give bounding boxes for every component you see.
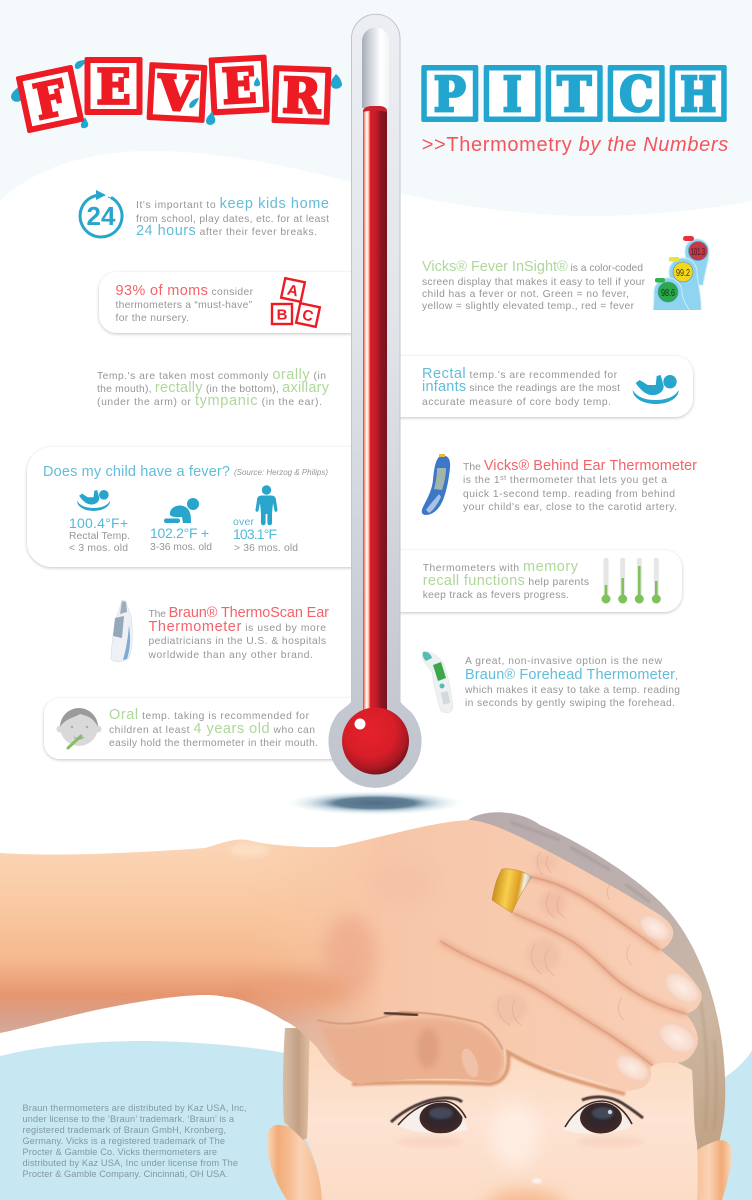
block P xyxy=(421,65,478,123)
left eye xyxy=(391,1098,468,1134)
fact: Vicks Behind Ear Thermometer: thermometer that lets you get a xyxy=(507,475,667,486)
fact: Braun ThermoScan: worldwide than any other brand. xyxy=(148,650,313,661)
icon: ABC blocks xyxy=(272,278,320,327)
fact: Braun ThermoScan: The Braun® ThermoScan Ear xyxy=(148,605,329,621)
icon: Braun ear thermometer xyxy=(111,600,132,662)
panel: memory recall xyxy=(392,550,682,612)
fact: Vicks Behind Ear Thermometer: The Vicks® Behind Ear Thermometer xyxy=(463,458,697,474)
block R: R xyxy=(281,68,322,125)
photo: child's head with hand on forehead xyxy=(0,800,752,1200)
thermometer floor shadow xyxy=(287,791,463,815)
block E xyxy=(84,57,142,116)
child's left ear xyxy=(267,1125,322,1200)
footer legal text: Procter & Gamble Company. Cincinnati, OH USA. xyxy=(22,1169,228,1179)
hair streaks xyxy=(510,822,716,1130)
arm and hand xyxy=(0,820,702,1090)
fact: Vicks Behind Ear Thermometer: quick 1-second temp. reading from behind xyxy=(463,489,675,500)
column: 3 to 36 months xyxy=(150,498,212,553)
footer legal text: Procter & Gamble Co. Vicks thermometers are xyxy=(22,1147,217,1157)
column: under 3 months: 100.4°F+ xyxy=(69,515,128,531)
panel: rectal temperature: accurate measure of core body temp. xyxy=(422,397,611,408)
icon: ABC blocks: C xyxy=(301,307,315,325)
panel: oral temperature: children at least 4 years old who can xyxy=(109,721,315,737)
panel: rectal temperature: infants since the readings are the most xyxy=(422,379,620,395)
hair at left temple xyxy=(283,1028,314,1140)
block V xyxy=(146,62,207,123)
fact: Vicks Behind Ear Thermometer: is the 1 xyxy=(463,475,500,486)
icon: ABC blocks: B xyxy=(277,306,288,324)
panel: 93% of moms xyxy=(99,272,360,333)
fact: Braun Forehead Thermometer xyxy=(422,652,680,713)
title: PITCH blocks xyxy=(421,65,727,123)
block V: V xyxy=(155,65,198,123)
fact: how temps are taken xyxy=(97,367,330,409)
icon: 24 hour arrow circle: 24 xyxy=(87,201,116,231)
block E xyxy=(209,55,270,116)
fact: Vicks Fever InSight: screen display that makes it easy to tell if your xyxy=(422,277,646,288)
column: under 3 months xyxy=(69,490,130,554)
fact: Vicks Behind Ear Thermometer xyxy=(422,454,697,515)
block C xyxy=(608,65,665,123)
fact: keep kids home 24 hours: It's important to keep kids home xyxy=(136,196,329,212)
fact: Braun ThermoScan xyxy=(111,600,329,662)
column: over 36 months xyxy=(233,485,298,554)
knuckle creases xyxy=(498,852,632,1026)
icon: child xyxy=(255,485,278,525)
fact: Vicks Fever InSight xyxy=(422,236,709,312)
panel: oral temperature xyxy=(44,698,360,759)
block P: P xyxy=(434,67,466,123)
panel: 93% of moms: thermometers a “must-have” xyxy=(116,300,253,311)
fact: Braun Forehead Thermometer: in seconds by gently swiping the forehead. xyxy=(465,698,675,709)
icon: child face with thermometer xyxy=(56,708,102,748)
icon: ABC blocks: A xyxy=(286,282,300,300)
footer legal text: registered trademark of Braun GmbH, Kronberg, xyxy=(22,1125,226,1135)
bulb highlight xyxy=(354,718,366,730)
fact: how temps are taken: Temp.'s are taken most commonly orally (in xyxy=(97,367,326,383)
fact: Vicks Behind Ear Thermometer: your child's ear, close to the carotid artery. xyxy=(463,502,677,513)
block H: H xyxy=(680,67,716,123)
block F: F xyxy=(29,70,71,131)
mercury column cap xyxy=(363,106,387,112)
finger gaps xyxy=(318,877,687,1066)
panel: memory recall: Thermometers with memory xyxy=(423,559,579,575)
fact: Braun Forehead Thermometer: A great, non-invasive option is the new xyxy=(465,656,663,667)
icon: infant xyxy=(77,490,110,511)
thermometer casing xyxy=(329,14,421,787)
child's hair xyxy=(320,812,725,1200)
column: under 3 months: < 3 mos. old xyxy=(69,543,128,554)
panel: does my child have a fever xyxy=(27,447,360,567)
fact: Vicks Fever InSight: yellow = slightly elevated temp., red = fever xyxy=(422,301,635,312)
droplets behind FEVER xyxy=(11,60,342,128)
face xyxy=(307,1030,698,1200)
footer legal text xyxy=(22,1103,246,1179)
block C: C xyxy=(619,67,653,123)
fact: how temps are taken: (under the arm) or tympanic (in the ear). xyxy=(97,393,322,409)
icon: Braun forehead thermometer xyxy=(422,652,453,713)
footer legal text: Germany. Vicks is a registered trademark of The xyxy=(22,1136,225,1146)
fact: keep kids home 24 hours xyxy=(80,190,329,239)
footer legal text: under license to the ‘Braun’ trademark. ‘Braun’ is a xyxy=(22,1114,235,1124)
gold wedding ring xyxy=(492,869,532,913)
column: 3 to 36 months: 3-36 mos. old xyxy=(150,542,212,553)
fact: Vicks Fever InSight: Vicks® Fever InSight® is a color-coded xyxy=(422,259,643,275)
fact: keep kids home 24 hours: from school, play dates, etc. for at least xyxy=(136,214,329,225)
block T: T xyxy=(557,67,591,123)
block R xyxy=(271,65,331,125)
panel: oral temperature: Oral temp. taking is recommended for xyxy=(109,707,310,723)
fact: Braun ThermoScan: Thermometer is used by more xyxy=(148,619,326,635)
panel: rectal temperature: Rectal temp.'s are recommended for xyxy=(422,366,618,382)
fact: Braun ThermoScan: pediatricians in the U.S. & hospitals xyxy=(148,636,326,647)
icon: crawling baby xyxy=(164,498,199,523)
source note: (Source: Herzog & Philips) xyxy=(234,468,328,477)
column: over 36 months: > 36 mos. old xyxy=(234,543,298,554)
droplets over FEVER xyxy=(189,77,260,125)
column: over 36 months: over xyxy=(233,516,254,528)
footer legal text: Braun thermometers are distributed by Kaz USA, Inc, xyxy=(22,1103,246,1113)
icon: 24 hour arrow circle xyxy=(80,190,122,237)
child's right ear xyxy=(697,1140,732,1200)
subtitle: >>Thermometry by the Numbers xyxy=(422,134,728,156)
empty glass tube xyxy=(362,28,389,108)
fact: Braun Forehead Thermometer: Braun® Forehead Thermometer, xyxy=(465,667,678,683)
arm skin xyxy=(0,820,702,1090)
fingernails xyxy=(458,909,706,1087)
fact: Braun Forehead Thermometer: which makes it easy to take a temp. reading xyxy=(464,685,680,696)
red display: 101.3 xyxy=(691,247,705,258)
block E: E xyxy=(221,58,258,115)
soft palm and knuckle shading xyxy=(230,843,566,1095)
panel: oral temperature: easily hold the thermometer in their mouth. xyxy=(109,738,318,749)
footer legal text: distributed by Kaz USA, Inc under license from The xyxy=(22,1158,238,1168)
panel: 93% of moms: for the nursery. xyxy=(116,313,189,324)
block I xyxy=(484,65,541,123)
panel: memory recall: keep track as fevers progress. xyxy=(423,590,569,601)
panel: memory recall: recall functions help parents xyxy=(423,573,589,589)
icon: color-coded thermometer displays xyxy=(653,236,709,312)
background: light blue footer wave xyxy=(0,1041,752,1200)
red mercury column xyxy=(363,106,387,725)
panel: 93% of moms: 93% of moms consider xyxy=(116,283,254,299)
panel: rectal temperature xyxy=(392,356,693,417)
chart: four small thermometers xyxy=(602,558,661,604)
column: 3 to 36 months: 102.2°F + xyxy=(150,525,209,541)
fact: keep kids home 24 hours: 24 hours after their fever breaks. xyxy=(136,223,317,239)
right eye xyxy=(563,1097,643,1134)
yellow display: 99.2 xyxy=(676,268,690,279)
column: over 36 months: 103.1°F xyxy=(233,526,277,542)
block F xyxy=(16,65,84,134)
thermometer xyxy=(287,14,463,815)
fact: how temps are taken: the mouth), rectally (in the bottom), axillary xyxy=(97,380,330,396)
mercury bulb xyxy=(342,708,409,774)
icon: Vicks behind-ear thermometer xyxy=(422,454,450,515)
fact: Vicks Behind Ear Thermometer: st xyxy=(500,475,506,482)
icon: infant xyxy=(633,375,679,404)
block I: I xyxy=(503,67,522,123)
fact: Vicks Fever InSight: child has a fever or not. Green = no fever, xyxy=(422,289,629,300)
panel heading: Does my child have a fever? xyxy=(43,464,230,480)
green display: 98.6 xyxy=(661,288,675,299)
title: FEVER blocks xyxy=(11,55,342,134)
nose and cheeks shading xyxy=(352,1052,644,1200)
block E: E xyxy=(96,60,130,116)
block T xyxy=(546,65,603,123)
column: under 3 months: Rectal Temp. xyxy=(69,531,130,542)
